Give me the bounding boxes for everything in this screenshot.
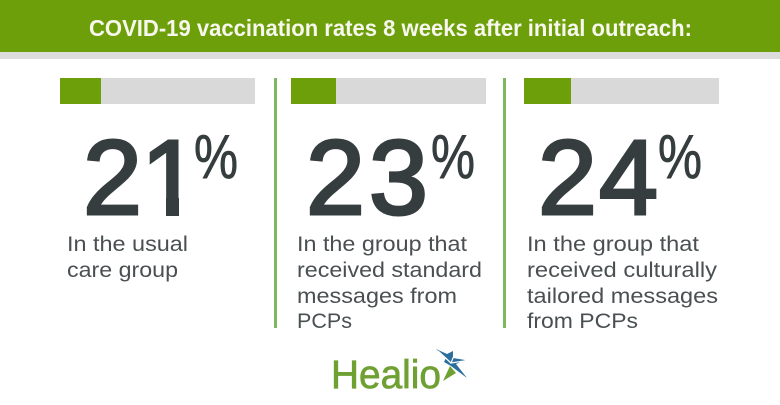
logo: Healio	[331, 349, 467, 397]
statistic: 24%: 2	[538, 119, 597, 237]
divider	[503, 78, 506, 328]
icon: star	[436, 349, 467, 381]
title: COVID-19 vaccination rates 8 weeks after initial outreach:	[89, 15, 692, 41]
statistic: 21%: 2	[83, 119, 142, 237]
description: culturally tailored messages: In the group that	[527, 232, 699, 256]
divider	[274, 78, 277, 328]
statistic: 21%: %	[194, 123, 238, 192]
description: usual care	[67, 232, 188, 282]
statistic: 21%: 1	[141, 119, 200, 237]
description: culturally tailored messages: received culturally	[527, 258, 717, 282]
description: standard messages	[297, 232, 482, 333]
description: usual care: In the usual	[67, 232, 188, 256]
statistic: 23%: 2	[306, 119, 365, 237]
statistic: 23%: 3	[369, 119, 428, 237]
description: standard messages: received standard	[297, 258, 482, 282]
statistic: 24%: 4	[599, 119, 658, 237]
statistic: 23%	[306, 119, 475, 237]
statistic: 24%: %	[658, 123, 702, 192]
progress bar: 21%	[60, 78, 255, 104]
progress bar: 24%	[524, 78, 719, 104]
description: culturally tailored messages: from PCPs	[527, 309, 638, 333]
wordmark: Healio	[331, 353, 441, 397]
panel: standard messages	[291, 78, 486, 333]
description: standard messages: In the group that	[297, 232, 467, 256]
description: standard messages: PCPs	[297, 309, 352, 333]
statistic: 24%	[538, 119, 702, 237]
panel: culturally tailored messages	[524, 78, 719, 333]
description: culturally tailored messages: tailored messages	[527, 284, 718, 308]
statistic: 23%: %	[431, 123, 475, 192]
description: usual care: care group	[67, 258, 178, 282]
description: culturally tailored messages	[527, 232, 718, 333]
statistic: 21%	[83, 119, 238, 237]
panel: usual care	[60, 78, 255, 282]
description: standard messages: messages from	[297, 284, 457, 308]
header banner	[0, 0, 780, 59]
progress bar: 23%	[291, 78, 486, 104]
